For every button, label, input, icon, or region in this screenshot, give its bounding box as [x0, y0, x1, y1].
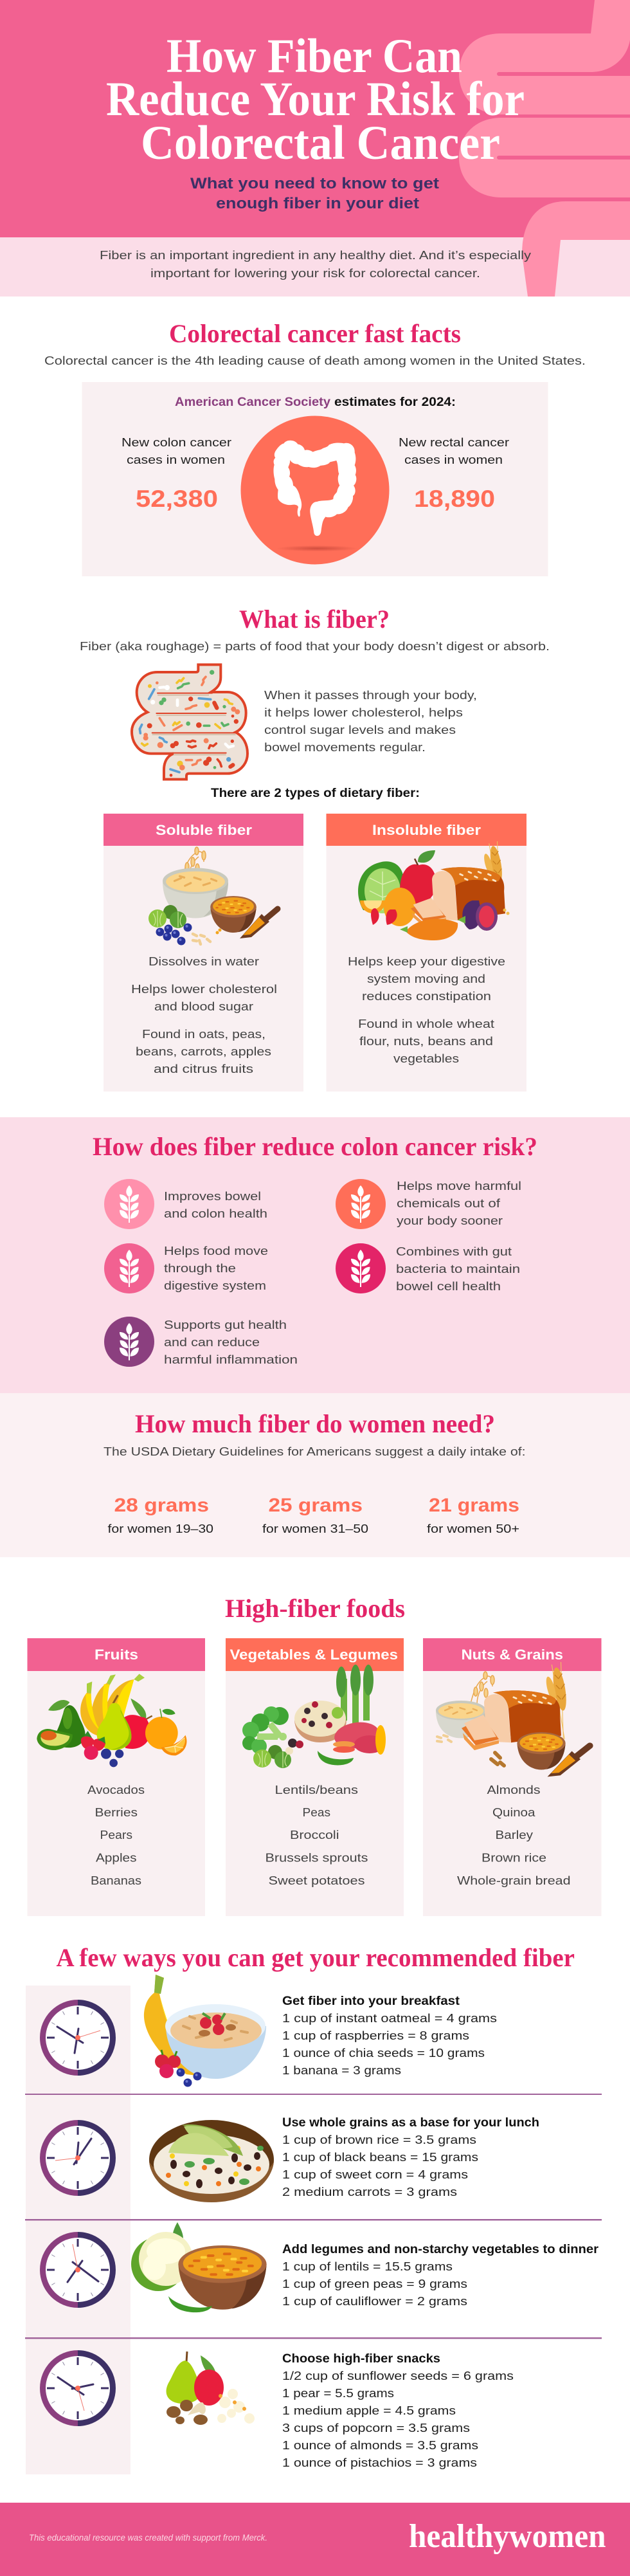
- fruit list: Pears: [100, 1829, 132, 1841]
- divider: [25, 2337, 602, 2339]
- soluble text: beans, carrots, apples: [136, 1045, 271, 1058]
- snacks text: [282, 2352, 514, 2469]
- clock column background: [26, 1986, 130, 2474]
- subtitle: enough fiber in your diet: [216, 195, 419, 212]
- benefit: food movement: through the: [164, 1262, 236, 1275]
- snacks text: 1 ounce of almonds = 3.5 grams: [282, 2439, 478, 2452]
- benefit: food movement: [104, 1243, 268, 1293]
- insoluble text: reduces constipation: [362, 990, 491, 1003]
- title: [106, 30, 525, 170]
- soluble text: Found in oats, peas,: [142, 1028, 266, 1041]
- insoluble text: Found in whole wheat: [358, 1018, 494, 1030]
- insoluble text: [348, 955, 505, 1065]
- grain list: Whole-grain bread: [457, 1874, 571, 1887]
- lunch text: [282, 2116, 539, 2198]
- benefit: moves chemicals: chemicals out of: [397, 1197, 501, 1210]
- header banner: [0, 0, 630, 297]
- benefit: moves chemicals: [336, 1179, 521, 1229]
- heading: How does fiber reduce colon cancer risk?: [93, 1132, 537, 1161]
- benefit: moves chemicals: your body sooner: [397, 1214, 503, 1227]
- fruit list: Bananas: [91, 1874, 141, 1887]
- section: what is fiber: [80, 605, 550, 1092]
- grain list: [457, 1784, 571, 1887]
- stat: colon cases: 52,380: [136, 486, 218, 512]
- icon: clock: [40, 2120, 116, 2196]
- lunch text: 1 cup of black beans = 15 grams: [282, 2151, 478, 2164]
- illustration: cabbage, apple, bread, fig: [358, 841, 509, 940]
- benefit: moves chemicals: Helps move harmful: [397, 1180, 521, 1192]
- benefit: bowel health: [104, 1179, 267, 1229]
- panel: soluble fiber: Soluble fiber: [156, 822, 252, 838]
- grain list: Almonds: [487, 1784, 540, 1796]
- benefit: gut bacteria: Combines with gut: [396, 1245, 512, 1258]
- stat: 31-50: for women 31–50: [262, 1522, 368, 1535]
- heading: How much fiber do women need?: [135, 1409, 495, 1438]
- illustration: cauliflower and lentils: [131, 2222, 267, 2312]
- section: how much fiber: [0, 1393, 630, 1557]
- grain list: Brown rice: [482, 1851, 546, 1864]
- vegetable list: Lentils/beans: [275, 1784, 358, 1796]
- dinner text: Add legumes and non-starchy vegetables to dinner: [282, 2243, 599, 2256]
- fact sentence: Colorectal cancer is the 4th leading cause of death among women in the United States.: [44, 354, 586, 367]
- icon: clock: [40, 2000, 116, 2076]
- lunch text: Use whole grains as a base for your lunch: [282, 2116, 539, 2130]
- insoluble text: system moving and: [367, 973, 485, 985]
- icon: colon in circle: [240, 416, 390, 565]
- description: it helps lower cholesterol, helps: [264, 706, 463, 719]
- insoluble text: Helps keep your digestive: [348, 955, 505, 968]
- benefit: gut bacteria: bacteria to maintain: [396, 1263, 520, 1275]
- breakfast text: 1 cup of instant oatmeal = 4 grams: [282, 2012, 497, 2025]
- benefit: inflammation: and can reduce: [164, 1336, 260, 1349]
- benefit: food movement: Helps food move: [164, 1245, 268, 1257]
- panel: fruits: [27, 1638, 205, 1916]
- panel title: [175, 396, 456, 409]
- snacks text: 1 medium apple = 4.5 grams: [282, 2404, 456, 2417]
- breakfast text: Get fiber into your breakfast: [282, 1995, 460, 2008]
- benefit: inflammation: [104, 1317, 298, 1367]
- stat: 50+: for women 50+: [427, 1522, 519, 1535]
- section: colorectal cancer fast facts: [44, 319, 586, 576]
- snacks text: 3 cups of popcorn = 3.5 grams: [282, 2422, 470, 2434]
- illustration: vegetables: [242, 1665, 386, 1768]
- benefit: bowel health: Improves bowel: [164, 1190, 261, 1203]
- intro text: Fiber is an important ingredient in any healthy diet. And it’s especially: [100, 249, 531, 262]
- snacks text: 1/2 cup of sunflower seeds = 6 grams: [282, 2370, 514, 2382]
- icon: intestine backdrop: [459, 0, 630, 297]
- insoluble text: vegetables: [393, 1052, 459, 1065]
- row: dinner: [40, 2222, 599, 2312]
- snacks text: 1 pear = 5.5 grams: [282, 2387, 394, 2400]
- stat: rectal cases: 18,890: [414, 486, 495, 512]
- benefit: gut bacteria: bowel cell health: [396, 1280, 501, 1293]
- description: When it passes through your body,: [264, 689, 477, 702]
- illustration: oatmeal and banana: [144, 1975, 266, 2087]
- vegetable list: Brussels sprouts: [265, 1851, 368, 1864]
- divider: [25, 2219, 602, 2220]
- dinner text: [282, 2243, 599, 2308]
- panel: nuts and grains: Nuts & Grains: [462, 1647, 563, 1663]
- dinner text: 1 cup of cauliflower = 2 grams: [282, 2295, 467, 2308]
- panel title: estimates for 2024:: [334, 396, 456, 409]
- row: breakfast: [40, 1975, 497, 2087]
- insoluble text: flour, nuts, beans and: [359, 1035, 493, 1048]
- icon: clock: [40, 2232, 116, 2308]
- icon: clock: [40, 2350, 116, 2426]
- lunch text: 1 cup of sweet corn = 4 grams: [282, 2168, 468, 2181]
- lunch text: 1 cup of brown rice = 3.5 grams: [282, 2133, 476, 2146]
- stat: 19-30: for women 19–30: [108, 1522, 213, 1535]
- stat: 31-50: 25 grams: [269, 1495, 363, 1516]
- illustration: fruits: [37, 1674, 186, 1767]
- vegetable list: Peas: [302, 1806, 330, 1819]
- benefit: gut bacteria: [336, 1243, 520, 1293]
- section: high-fiber foods: [27, 1594, 602, 1916]
- illustration: grain bowl: [149, 2120, 274, 2202]
- breakfast text: [282, 1995, 497, 2077]
- breakfast text: 1 ounce of chia seeds = 10 grams: [282, 2047, 485, 2060]
- title: Reduce Your Risk for: [106, 73, 525, 126]
- benefit: food movement: digestive system: [164, 1279, 266, 1292]
- description: [264, 689, 477, 754]
- fruit list: [87, 1784, 145, 1887]
- grain list: Quinoa: [492, 1806, 536, 1819]
- breakfast text: 1 banana = 3 grams: [282, 2064, 401, 2077]
- description: control sugar levels and makes: [264, 724, 456, 736]
- description: bowel movements regular.: [264, 741, 426, 754]
- soluble text: Helps lower cholesterol: [131, 983, 277, 996]
- vegetable list: [265, 1784, 368, 1887]
- stat: colon cases: [122, 436, 231, 512]
- panel: fruits: Fruits: [94, 1647, 138, 1663]
- subtitle: What you need to know to get: [190, 175, 439, 192]
- heading: A few ways you can get your recommended fiber: [57, 1943, 575, 1972]
- stat: rectal cases: [399, 436, 509, 512]
- vegetable list: Broccoli: [290, 1829, 339, 1841]
- stat: 31-50: [262, 1495, 368, 1535]
- illustration: intestine with bacteria: [132, 664, 248, 780]
- dinner text: 1 cup of lentils = 15.5 grams: [282, 2260, 453, 2273]
- panel: vegetables and legumes: Vegetables & Legumes: [230, 1647, 398, 1663]
- section: how fiber reduces risk: [0, 1117, 630, 1393]
- panel: soluble fiber: [104, 814, 303, 1092]
- soluble text: [131, 955, 277, 1075]
- subheading: There are 2 types of dietary fiber:: [211, 787, 420, 800]
- soluble text: Dissolves in water: [148, 955, 259, 968]
- vegetable list: Sweet potatoes: [269, 1874, 365, 1887]
- stat: rectal cases: cases in women: [404, 453, 503, 466]
- panel: nuts and grains: [423, 1638, 602, 1916]
- stat: rectal cases: New rectal cancer: [399, 436, 509, 449]
- stat: 50+: [427, 1495, 519, 1535]
- benefit: inflammation: Supports gut health: [164, 1319, 287, 1331]
- panel: insoluble fiber: [327, 814, 526, 1092]
- stat: colon cases: cases in women: [127, 453, 225, 466]
- benefit: bowel health: and colon health: [164, 1207, 267, 1220]
- panel title: American Cancer Society: [175, 396, 330, 409]
- section: ways to get fiber: [25, 1943, 602, 2474]
- soluble text: and blood sugar: [154, 1000, 253, 1013]
- intro text: [100, 249, 531, 280]
- dinner text: 1 cup of green peas = 9 grams: [282, 2278, 467, 2290]
- panel: vegetables and legumes: [226, 1638, 404, 1916]
- divider: [25, 2094, 602, 2095]
- heading: What is fiber?: [239, 605, 390, 634]
- definition: Fiber (aka roughage) = parts of food that your body doesn’t digest or absorb.: [80, 640, 550, 653]
- logo wordmark: healthywomen: [409, 2518, 606, 2555]
- fruit list: Avocados: [87, 1784, 145, 1796]
- snacks text: Choose high-fiber snacks: [282, 2352, 440, 2366]
- row: lunch: [40, 2116, 539, 2202]
- illustration: pear, apple, nuts, popcorn: [166, 2352, 255, 2425]
- footer: [0, 2503, 630, 2576]
- heading: Colorectal cancer fast facts: [169, 319, 461, 348]
- panel: insoluble fiber: Insoluble fiber: [372, 822, 481, 838]
- illustration: grains: [436, 1662, 590, 1777]
- support note: This educational resource was created with support from Merck.: [29, 2532, 267, 2543]
- grain list: Barley: [495, 1829, 533, 1841]
- stat: colon cases: New colon cancer: [122, 436, 231, 449]
- soluble text: and citrus fruits: [154, 1063, 253, 1075]
- subtitle: [190, 175, 439, 212]
- stat: 19-30: 28 grams: [114, 1495, 209, 1516]
- stat: 19-30: [108, 1495, 213, 1535]
- breakfast text: 1 cup of raspberries = 8 grams: [282, 2029, 469, 2042]
- snacks text: 1 ounce of pistachios = 3 grams: [282, 2456, 477, 2469]
- stat: 50+: 21 grams: [429, 1495, 519, 1516]
- illustration: oats, sprouts, berries, lentils: [148, 847, 278, 945]
- lunch text: 2 medium carrots = 3 grams: [282, 2186, 457, 2198]
- row: snacks: [40, 2350, 514, 2469]
- title: How Fiber Can: [166, 30, 462, 83]
- fruit list: Apples: [96, 1851, 136, 1864]
- title: Colorectal Cancer: [141, 116, 500, 170]
- intro text: important for lowering your risk for colorectal cancer.: [150, 267, 480, 280]
- benefit: inflammation: harmful inflammation: [164, 1353, 298, 1366]
- heading: High-fiber foods: [225, 1594, 405, 1623]
- fruit list: Berries: [95, 1806, 138, 1819]
- panel: estimates: [82, 382, 548, 576]
- guideline sentence: The USDA Dietary Guidelines for Americans suggest a daily intake of:: [104, 1445, 526, 1458]
